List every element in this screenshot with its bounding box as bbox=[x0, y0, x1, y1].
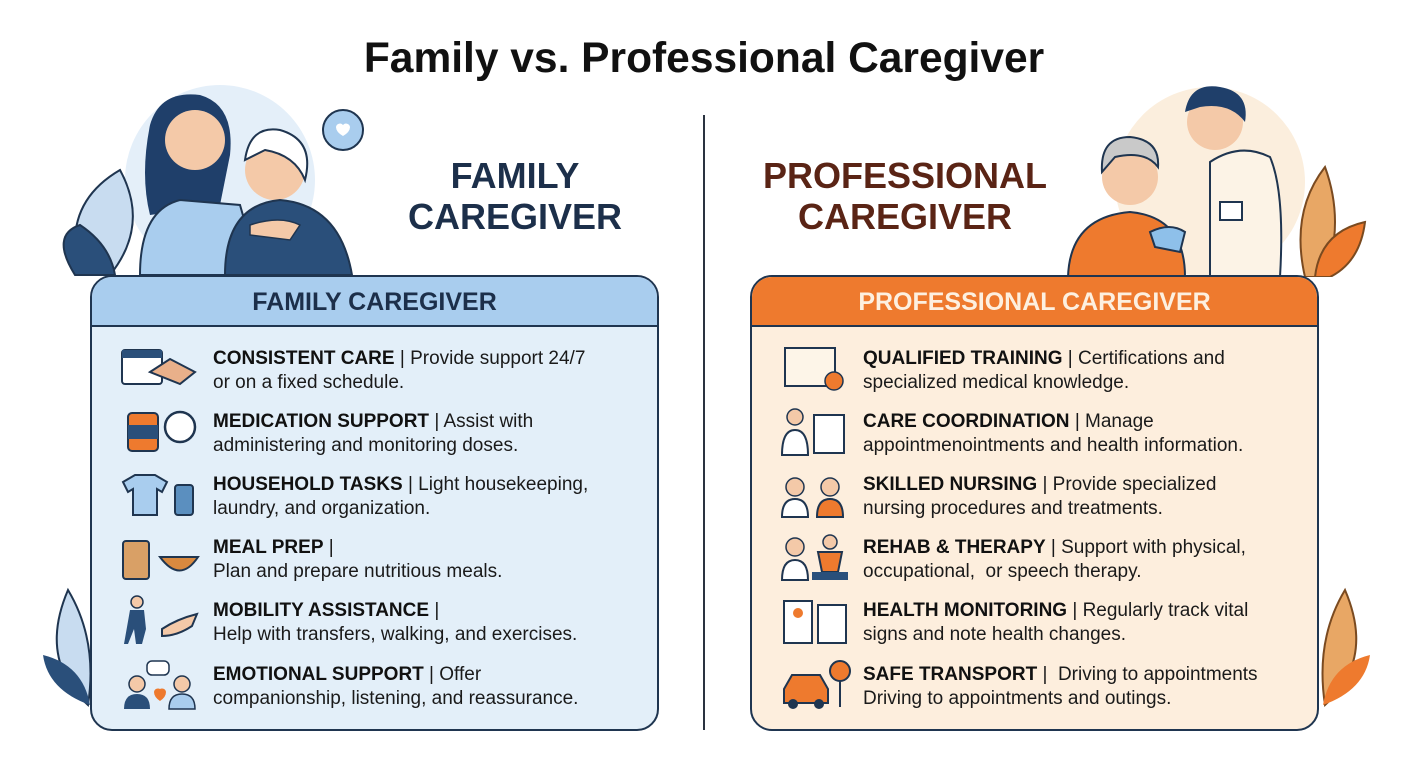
heading: family caregiver: FAMILY bbox=[451, 155, 579, 196]
item: qualified training: specialized medical knowledge. bbox=[863, 372, 1129, 393]
item: medication support: MEDICATION SUPPORT | Assist with bbox=[213, 411, 533, 432]
panel header bbox=[752, 277, 1317, 327]
item: consistent care bbox=[213, 348, 585, 393]
item: medication support bbox=[213, 411, 533, 456]
decoration: left leaves bbox=[43, 588, 90, 707]
item: rehab & therapy bbox=[863, 537, 1246, 582]
item: mobility assistance bbox=[213, 600, 577, 645]
item: meal prep: MEAL PREP | bbox=[213, 537, 334, 558]
panel header bbox=[92, 277, 657, 327]
item: household tasks bbox=[213, 474, 588, 519]
item: skilled nursing: SKILLED NURSING | Provide specialized bbox=[863, 474, 1216, 495]
icon: rehab bbox=[781, 534, 848, 581]
icon: car bbox=[783, 660, 851, 709]
item: emotional support bbox=[213, 664, 578, 709]
icon: health monitoring bbox=[783, 600, 847, 644]
item: safe transport: Driving to appointments and outings. bbox=[863, 688, 1171, 709]
icon: calendar handshake bbox=[121, 349, 197, 386]
item: consistent care: or on a fixed schedule. bbox=[213, 372, 404, 393]
icon: skilled nursing bbox=[781, 477, 844, 518]
item: skilled nursing: nursing procedures and treatments. bbox=[863, 498, 1163, 519]
illustration: professional caregiver bbox=[1067, 86, 1366, 277]
heading: family caregiver bbox=[408, 155, 622, 237]
item: mobility assistance: Help with transfers, walking, and exercises. bbox=[213, 624, 577, 645]
icon: care coordination bbox=[781, 408, 845, 456]
item: qualified training bbox=[863, 348, 1225, 393]
panel: family caregiver bbox=[90, 275, 659, 731]
icon: certificate bbox=[784, 347, 844, 391]
icon: mobility bbox=[124, 595, 199, 644]
item: mobility assistance: MOBILITY ASSISTANCE | bbox=[213, 600, 439, 621]
divider bbox=[703, 115, 705, 730]
item: rehab & therapy: REHAB & THERAPY | Support with physical, bbox=[863, 537, 1246, 558]
icon: emotional support bbox=[124, 660, 196, 710]
heading: professional caregiver: PROFESSIONAL bbox=[763, 155, 1047, 196]
item: care coordination: appointmenointments and health information. bbox=[863, 435, 1243, 456]
panel header: FAMILY CAREGIVER bbox=[252, 288, 497, 316]
item: household tasks: HOUSEHOLD TASKS | Light housekeeping, bbox=[213, 474, 588, 495]
item: rehab & therapy: occupational, or speech therapy. bbox=[863, 561, 1142, 582]
heading: family caregiver: CAREGIVER bbox=[408, 196, 622, 237]
icon: meal bbox=[122, 540, 200, 580]
item: health monitoring: HEALTH MONITORING | Regularly track vital bbox=[863, 600, 1248, 621]
icon: household bbox=[122, 474, 194, 516]
item: meal prep: Plan and prepare nutritious meals. bbox=[213, 561, 502, 582]
item: qualified training: QUALIFIED TRAINING | Certifications and bbox=[863, 348, 1225, 369]
item: medication support: administering and monitoring doses. bbox=[213, 435, 518, 456]
item: safe transport: SAFE TRANSPORT | Driving to appointments bbox=[863, 664, 1258, 685]
heading: professional caregiver: CAREGIVER bbox=[798, 196, 1012, 237]
decoration: right leaves bbox=[1322, 588, 1370, 707]
item: household tasks: laundry, and organization. bbox=[213, 498, 430, 519]
panel header: PROFESSIONAL CAREGIVER bbox=[858, 288, 1211, 316]
panel: professional caregiver bbox=[750, 275, 1319, 731]
illustration: family caregiver bbox=[62, 85, 364, 276]
item: emotional support: companionship, listening, and reassurance. bbox=[213, 688, 578, 709]
item: care coordination: CARE COORDINATION | Manage bbox=[863, 411, 1154, 432]
icon: medication bbox=[127, 410, 196, 452]
item: health monitoring: signs and note health changes. bbox=[863, 624, 1126, 645]
item: emotional support: EMOTIONAL SUPPORT | Offer bbox=[213, 664, 481, 685]
item: health monitoring bbox=[863, 600, 1248, 645]
heading: professional caregiver bbox=[763, 155, 1047, 237]
item: consistent care: CONSISTENT CARE | Provide support 24/7 bbox=[213, 348, 585, 369]
item: safe transport bbox=[863, 664, 1258, 709]
item: care coordination bbox=[863, 411, 1243, 456]
item: skilled nursing bbox=[863, 474, 1216, 519]
item: meal prep bbox=[213, 537, 502, 582]
title: Family vs. Professional Caregiver bbox=[364, 35, 1044, 82]
